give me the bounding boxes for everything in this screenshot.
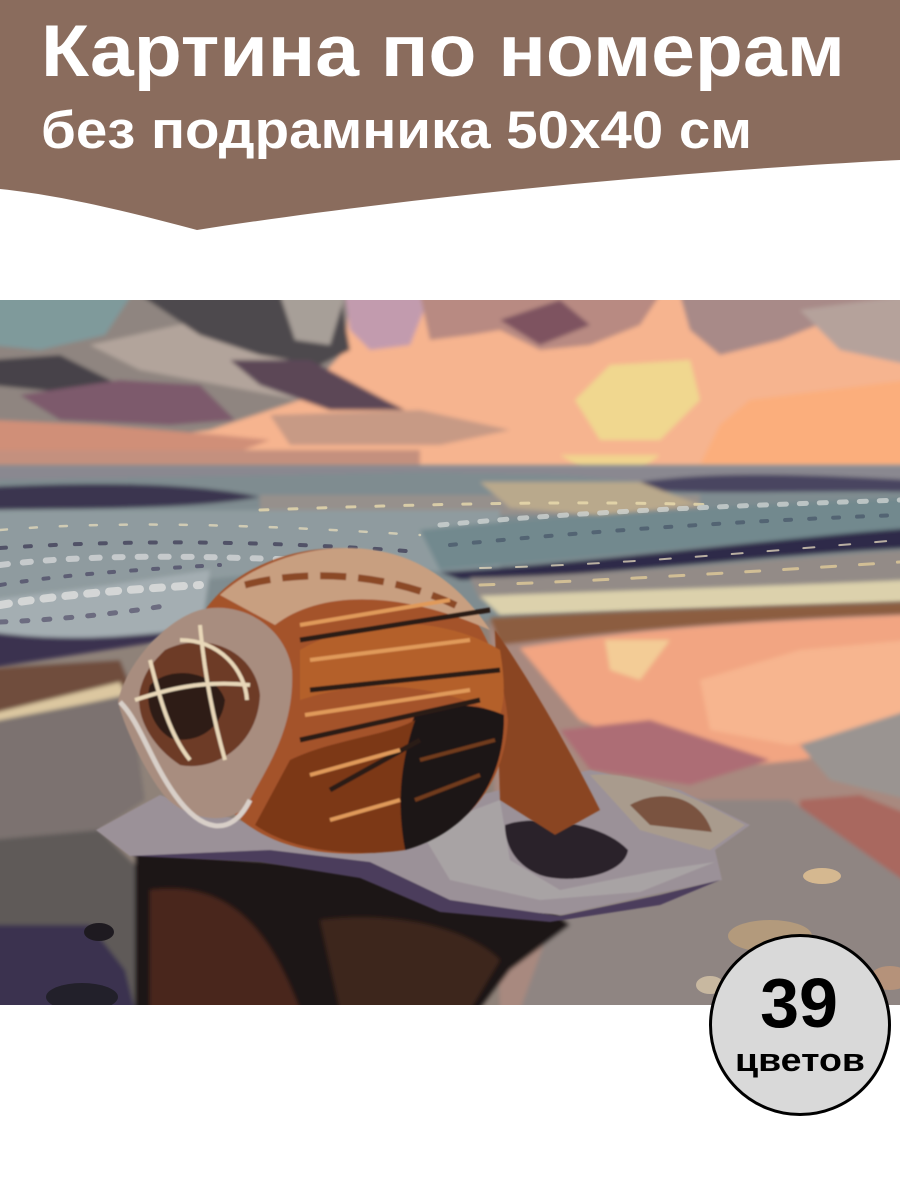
- painting: snail on the beach at sunset: [0, 290, 900, 1011]
- badge number: 39: [760, 964, 838, 1042]
- badge label: цветов: [735, 1042, 865, 1078]
- sea waves: [0, 465, 900, 670]
- snail shell: [118, 548, 600, 854]
- foam brush strokes: [0, 500, 900, 622]
- wet sand and reflection: [0, 602, 900, 1010]
- snail foot: [96, 770, 750, 922]
- title: Картина по номерам: [41, 11, 845, 92]
- beach pebbles: [46, 868, 900, 1011]
- sky: [0, 290, 900, 472]
- subtitle: без подрамника 50х40 см: [41, 101, 752, 160]
- header banner: [0, 0, 900, 230]
- badge: 39 colours: [710, 936, 890, 1114]
